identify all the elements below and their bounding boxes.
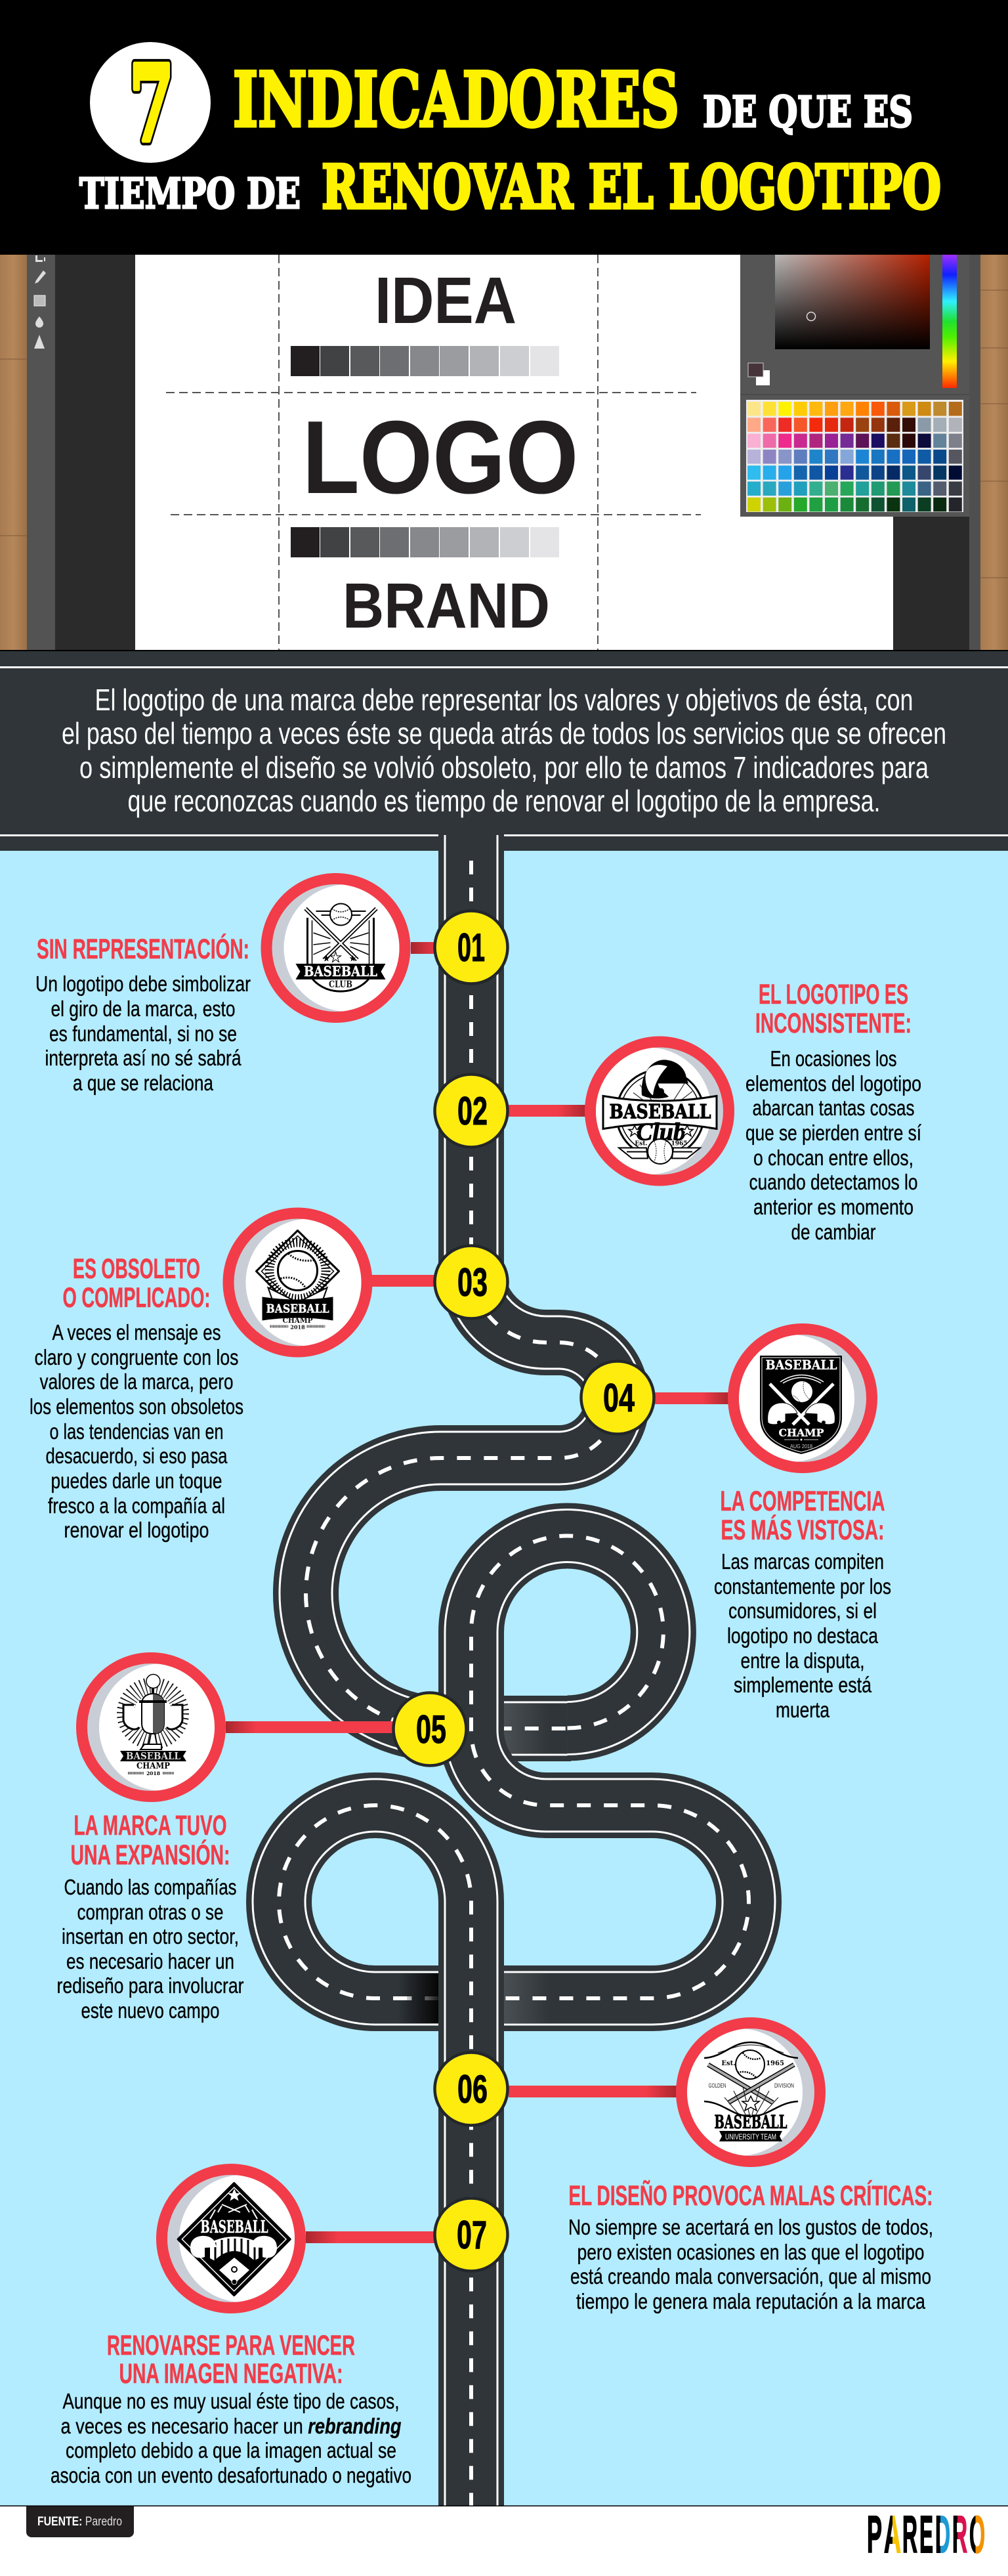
Paredro wordmark: R — [952, 2505, 967, 2564]
logo badge 3: baseball champ 2018 diamond: CHAMP — [282, 1316, 312, 1325]
section 1 text: sin representación: Un logotipo debe simbolizar — [35, 972, 251, 996]
logo badge 3: baseball champ 2018 diamond — [228, 1213, 373, 1352]
section 7 text: imagen negativa: RENOVARSE PARA VENCER — [107, 2330, 355, 2361]
section 4 text: competencia más vistosa: muerta — [776, 1698, 830, 1722]
source tag — [26, 2506, 134, 2537]
word LOGO: LOGO — [302, 400, 579, 515]
logo badge 5: baseball champ trophy: 2018 — [146, 1771, 160, 1776]
step 01 marker — [434, 911, 508, 983]
Paredro wordmark: E — [919, 2505, 933, 2564]
word BRAND: BRAND — [343, 570, 550, 641]
number seven badge: 7 — [129, 42, 174, 165]
word IDEA: IDEA — [375, 264, 516, 337]
section 1 text: sin representación: es fundamental, si no se — [49, 1021, 237, 1046]
section 2 text: logotipo inconsistente: anterior es momento — [753, 1195, 914, 1219]
section 4 text: competencia más vistosa: consumidores, si el — [728, 1599, 877, 1623]
section 3 text: obsoleto o complicado: fresco a la compañía al — [48, 1493, 225, 1518]
title line two: TIEMPO DE — [79, 169, 301, 219]
step 02 marker: 02 — [457, 1089, 488, 1133]
section 3 text: obsoleto o complicado: renovar el logotipo — [64, 1518, 209, 1542]
header band — [0, 0, 1008, 255]
logo badge 4: baseball champ black shield: AUG 2018 — [790, 1444, 812, 1449]
section 4 text: competencia más vistosa: Las marcas compiten — [721, 1549, 884, 1574]
section 2 text: logotipo inconsistente: elementos del logotipo — [746, 1071, 921, 1096]
footer — [0, 2505, 1008, 2576]
step 05 marker: 05 — [416, 1707, 446, 1751]
logo badge 6: baseball university team: UNIVERSITY TEAM — [725, 2132, 776, 2141]
section 5 text: marca tuvo una expansión: rediseño para involucrar — [56, 1973, 244, 1998]
source tag: FUENTE: Paredro — [37, 2515, 122, 2529]
grey scale bar top — [291, 346, 559, 376]
step 03 marker — [434, 1246, 508, 1318]
logo badge 6: baseball university team: GOLDEN — [709, 2082, 726, 2089]
logo badge 6: baseball university team — [675, 2023, 820, 2161]
section 1 text: sin representación: SIN REPRESENTACIÓN: — [37, 933, 249, 965]
section 5 text: marca tuvo una expansión: Cuando las compañías — [64, 1875, 236, 1899]
section 4 text: competencia más vistosa: entre la disputa, — [740, 1648, 865, 1673]
section 7 text: imagen negativa — [51, 2330, 411, 2487]
logo badge 1: baseball club shield: CLUB — [329, 979, 352, 990]
section 1 text: sin representación: el giro de la marca, esto — [51, 997, 235, 1021]
logo badge 2: baseball club helmet: Est. — [635, 1141, 648, 1148]
step 01 marker: 01 — [457, 926, 485, 970]
section 2 text: logotipo inconsistente: En ocasiones los — [770, 1046, 896, 1071]
section 2 text: logotipo inconsistente: abarcan tantas cosas — [752, 1096, 915, 1120]
logo badge 6: baseball university team: DIVISION — [774, 2082, 794, 2089]
section 6 text: malas críticas — [568, 2180, 933, 2313]
section 1 text: sin representación — [35, 933, 251, 1095]
logo badge 4: baseball champ black shield: CHAMP — [778, 1427, 824, 1439]
section 3 text: obsoleto o complicado: claro y congruente con los — [34, 1345, 239, 1369]
winding road — [279, 834, 749, 2506]
section 7 text: imagen negativa: asocia con un evento desafortunado o negativo — [51, 2463, 411, 2487]
logo badge 1: baseball club shield — [266, 878, 411, 1018]
step 04 marker — [581, 1362, 654, 1434]
section 2 text: logotipo inconsistente — [746, 979, 921, 1244]
section 1 text: sin representación: interpreta así no sé sabrá — [45, 1046, 242, 1070]
section 3 text: obsoleto o complicado: A veces el mensaje es — [52, 1320, 220, 1344]
tool icons — [34, 255, 46, 349]
section 7 text: imagen negativa: completo debido a que la imagen actual se — [66, 2438, 396, 2462]
section 7 text: imagen negativa: Aunque no es muy usual éste tipo de casos, — [63, 2389, 399, 2413]
section 5 text: marca tuvo una expansión: es necesario hacer un — [66, 1949, 234, 1973]
step 06 marker: 06 — [457, 2067, 488, 2111]
section 5 text: marca tuvo una expansión: LA MARCA TUVO — [74, 1810, 227, 1841]
logo badge 7: baseball diamond: BASEBALL — [201, 2218, 268, 2237]
logo badge 1: baseball club shield: BASEBALL — [304, 963, 377, 979]
step 07 marker: 07 — [457, 2213, 487, 2257]
section 5 text: marca tuvo una expansión — [56, 1810, 244, 2023]
number seven badge — [90, 42, 211, 165]
logo badge 5: baseball champ trophy — [81, 1658, 226, 1796]
section 4 text: competencia más vistosa: simplemente está — [734, 1673, 872, 1697]
section 2 text: logotipo inconsistente: EL LOGOTIPO ES — [759, 979, 908, 1010]
step 05 marker — [394, 1692, 466, 1766]
step 07 marker — [434, 2198, 508, 2271]
section 4 text: competencia más vistosa: ES MÁS VISTOSA: — [721, 1514, 885, 1546]
section 3 text: obsoleto o complicado: desacuerdo, si eso pasa — [46, 1444, 228, 1468]
Paredro wordmark: R — [902, 2505, 917, 2564]
step 02 marker — [434, 1074, 508, 1148]
number seven badge: 7 — [129, 42, 174, 165]
logo badge 2: baseball club helmet: Club — [636, 1119, 686, 1146]
Paredro wordmark: D — [935, 2505, 950, 2564]
section 2 text: logotipo inconsistente: de cambiar — [791, 1220, 876, 1244]
title line one: INDICADORES — [233, 56, 679, 144]
colour swatches — [746, 400, 963, 512]
light blue background — [0, 851, 1008, 2506]
canvas guides — [166, 255, 701, 651]
logo badge 4: baseball champ black shield — [727, 1329, 872, 1468]
Paredro wordmark — [867, 2505, 985, 2564]
design software hero image — [0, 255, 1008, 651]
logo badge 5: baseball champ trophy: CHAMP — [136, 1761, 170, 1771]
logo badge 2: baseball club helmet — [584, 1042, 728, 1180]
logo badge 7: baseball diamond — [161, 2169, 306, 2308]
logo badge 3: baseball champ 2018 diamond: BASEBALL — [266, 1302, 329, 1316]
section 1 text: sin representación: a que se relaciona — [73, 1071, 214, 1095]
section 4 text: competencia más vistosa: constantemente por los — [714, 1574, 891, 1599]
logo badge 5: baseball champ trophy: BASEBALL — [126, 1750, 180, 1762]
logo badge 6: baseball university team: BASEBALL — [714, 2111, 788, 2133]
title line one: DE QUE ES — [703, 87, 913, 137]
section 2 text: logotipo inconsistente: o chocan entre ellos, — [753, 1146, 914, 1170]
section 3 text: obsoleto o complicado: los elementos son obsoletos — [30, 1394, 243, 1419]
section 2 text: logotipo inconsistente: INCONSISTENTE: — [755, 1008, 912, 1039]
section 2 text: logotipo inconsistente: que se pierden entre sí — [746, 1121, 921, 1145]
section 3 text: obsoleto o complicado: o las tendencias van en — [50, 1419, 223, 1444]
logo badge 6: baseball university team: 1965 — [766, 2060, 784, 2067]
step 03 marker: 03 — [457, 1260, 488, 1304]
logo badge 3: baseball champ 2018 diamond: 2018 — [290, 1323, 305, 1330]
step 06 marker — [434, 2052, 508, 2126]
logo badge 2: baseball club helmet: 1965 — [671, 1141, 688, 1148]
section 5 text: marca tuvo una expansión: compran otras o se — [77, 1900, 223, 1924]
section 4 text: competencia más vistosa: LA COMPETENCIA — [721, 1486, 885, 1517]
section 7 text: imagen negativa: a veces es necesario hacer un rebranding — [60, 2414, 402, 2438]
title line two — [79, 152, 941, 223]
Paredro wordmark: A — [884, 2505, 901, 2564]
section 5 text: marca tuvo una expansión: insertan en otro sector, — [62, 1924, 239, 1948]
step 04 marker: 04 — [603, 1376, 635, 1420]
section 3 text: obsoleto o complicado — [30, 1253, 243, 1542]
section 2 text: logotipo inconsistente: cuando detectamos lo — [749, 1170, 917, 1194]
section 4 text: competencia más vistosa: logotipo no destaca — [727, 1623, 879, 1648]
colour picker panel — [740, 255, 969, 517]
section 3 text: obsoleto o complicado: puedes darle un toque — [51, 1469, 222, 1493]
intro band — [0, 650, 1008, 851]
logo badge 4: baseball champ black shield: BASEBALL — [765, 1357, 837, 1373]
section 7 text: imagen negativa: UNA IMAGEN NEGATIVA: — [119, 2358, 343, 2390]
red connectors — [226, 942, 730, 2243]
section 6 text: malas críticas: tiempo le genera mala reputación a la marca — [576, 2289, 926, 2313]
section 3 text: obsoleto o complicado: valores de la marca, pero — [39, 1369, 234, 1394]
section 5 text: marca tuvo una expansión: este nuevo campo — [81, 1998, 219, 2023]
logo badge 2: baseball club helmet: BASEBALL — [609, 1100, 711, 1124]
grey scale bar bottom — [291, 527, 559, 557]
section 5 text: marca tuvo una expansión: UNA EXPANSIÓN: — [71, 1839, 230, 1871]
Paredro wordmark: P — [867, 2505, 882, 2564]
intro text — [62, 683, 946, 818]
section 3 text: obsoleto o complicado: O COMPLICADO: — [63, 1282, 210, 1314]
logo badge 6: baseball university team: Est. — [721, 2060, 736, 2067]
section 6 text: malas críticas: pero existen ocasiones en las que el logotipo — [578, 2240, 924, 2264]
section 3 text: obsoleto o complicado: ES OBSOLETO — [73, 1253, 200, 1285]
section 4 text: competencia más vistosa — [714, 1486, 891, 1722]
